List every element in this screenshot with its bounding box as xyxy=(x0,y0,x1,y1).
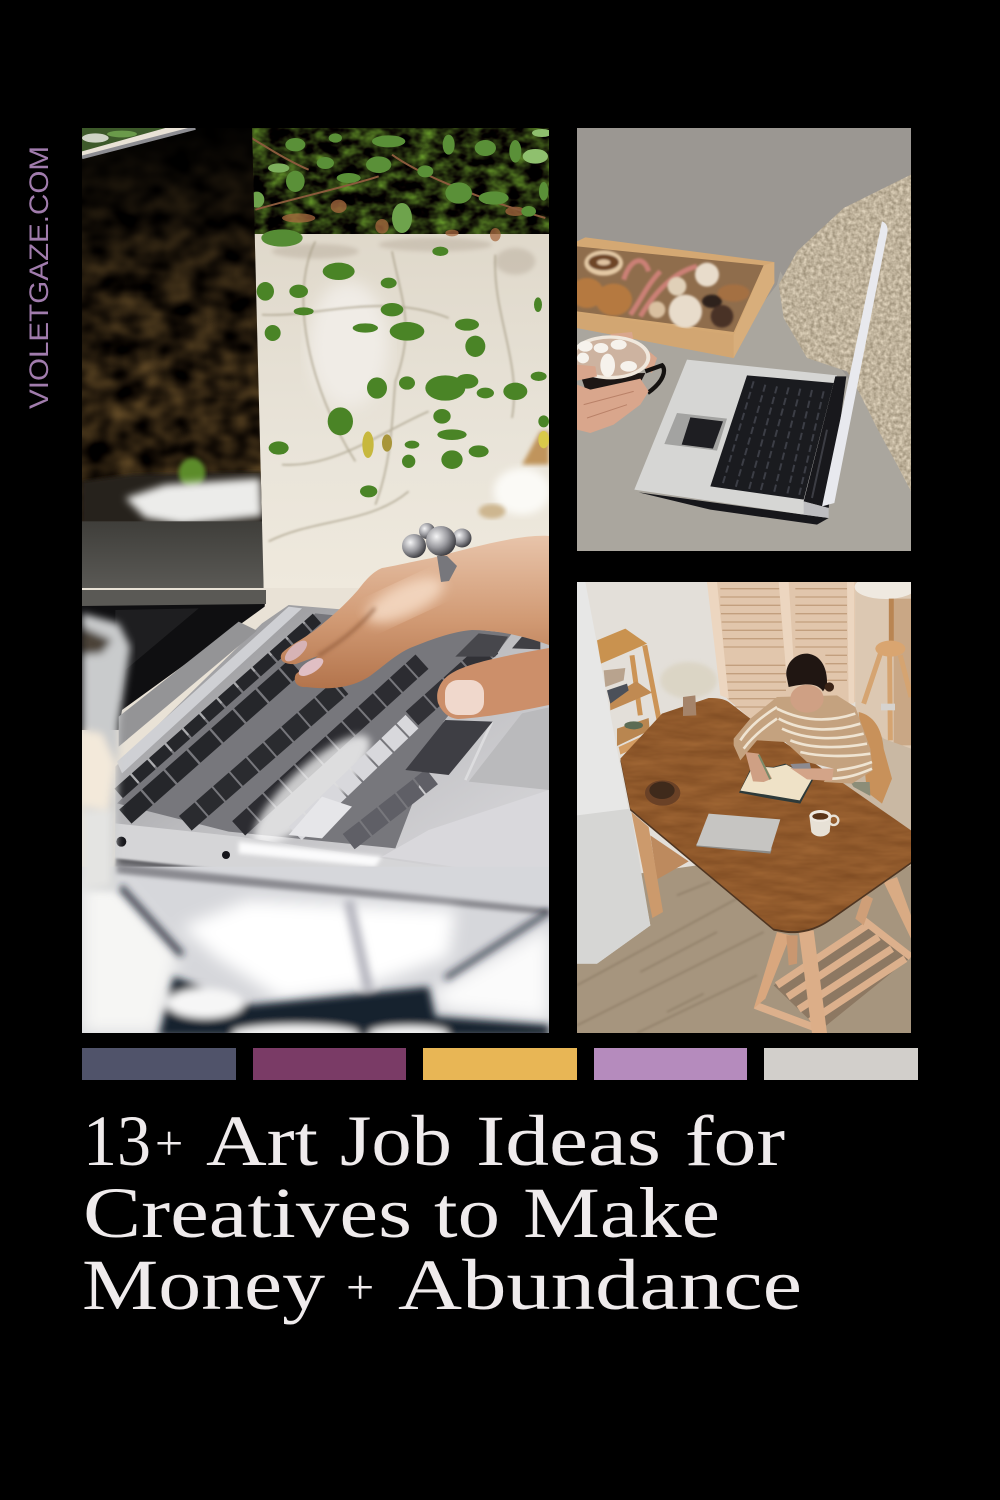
title: Make xyxy=(523,1173,720,1253)
lower part of photo: laptop, glass, glasses xyxy=(82,590,549,1042)
tray xyxy=(577,237,774,358)
colour swatches xyxy=(82,1048,918,1080)
photo: laptop on sofa with snacks xyxy=(570,128,914,551)
leaves xyxy=(250,129,552,247)
glasses foreground blur xyxy=(82,867,549,1033)
photo: woman at wooden desk xyxy=(577,575,916,1033)
title: Abundance xyxy=(398,1245,802,1325)
vase and dried flowers xyxy=(660,662,717,716)
title: Ideas xyxy=(476,1101,661,1181)
woman xyxy=(734,654,873,796)
white panel xyxy=(577,582,650,964)
coffee cup xyxy=(809,810,838,836)
chair xyxy=(859,712,892,804)
title: for xyxy=(685,1101,785,1181)
upper part of photo: foliage, wall, screen xyxy=(82,128,552,588)
shutters xyxy=(707,582,855,719)
title xyxy=(82,1096,802,1325)
title: Creatives xyxy=(83,1173,412,1253)
photo: hand typing on laptop xyxy=(82,128,552,1042)
blurred glass at left xyxy=(82,613,130,890)
floor lamp xyxy=(854,582,911,740)
keyboard glare xyxy=(248,730,375,843)
title: Job xyxy=(340,1101,452,1181)
title: 13 xyxy=(83,1101,151,1181)
knit pillow xyxy=(774,171,914,495)
title: + xyxy=(155,1115,183,1171)
front trestle legs xyxy=(754,877,911,1033)
right wall and floor xyxy=(855,582,911,749)
keyboard keys xyxy=(119,618,422,828)
title: to xyxy=(434,1173,500,1253)
title: Money xyxy=(82,1245,325,1325)
hand xyxy=(281,536,549,719)
open notebook xyxy=(739,764,814,804)
floor xyxy=(577,865,911,1033)
laptop deck xyxy=(115,605,549,883)
rear table leg xyxy=(650,835,689,879)
laptop front edge xyxy=(116,824,350,866)
bowl of cones xyxy=(645,780,680,806)
laptop screen reflecting foliage xyxy=(82,128,269,588)
laptop xyxy=(634,221,888,525)
mug and hands xyxy=(570,332,664,433)
brand vertical text: VIOLETGAZE.COM xyxy=(24,146,54,409)
ring xyxy=(402,523,472,582)
closed laptop xyxy=(696,814,780,854)
table top xyxy=(617,695,914,935)
keyboard bed xyxy=(117,613,512,848)
shelf xyxy=(597,629,664,755)
writing hand and pen xyxy=(745,752,834,782)
title: + xyxy=(346,1259,374,1315)
title: Art xyxy=(206,1101,318,1181)
